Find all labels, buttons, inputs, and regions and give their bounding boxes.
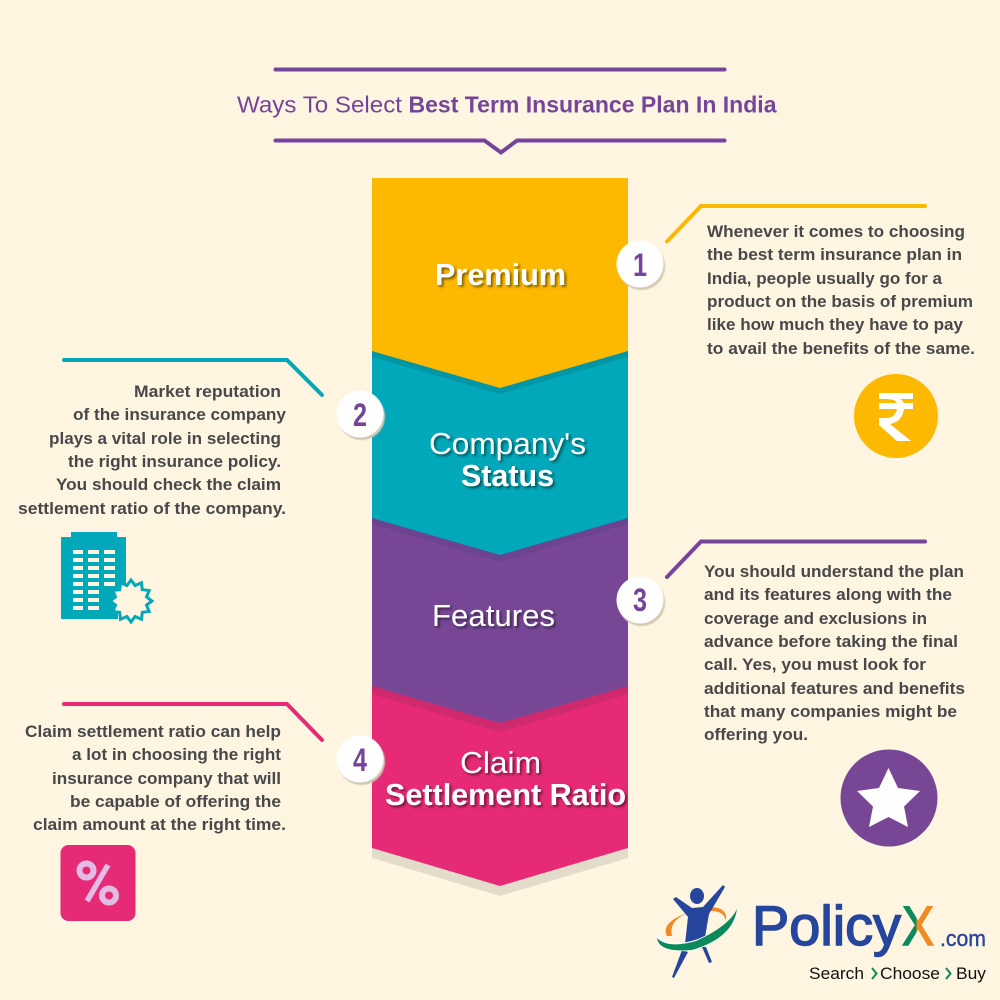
text block 3: that many companies might be xyxy=(704,702,957,721)
logo tagline xyxy=(809,964,987,983)
logo wordmark: .com xyxy=(940,926,986,951)
text block 3: coverage and exclusions in xyxy=(704,609,927,628)
text block 1: product on the basis of premium xyxy=(707,292,973,311)
text block 4: be capable of offering the xyxy=(70,792,281,811)
logo wordmark xyxy=(752,894,986,957)
band heading: Company's Status: Company's xyxy=(429,426,586,461)
text block 3: and its features along with the xyxy=(704,585,952,604)
number badge 3 xyxy=(616,576,664,624)
band heading: Company's Status: Status xyxy=(461,458,554,493)
band: premium xyxy=(372,178,628,388)
text block 1 xyxy=(707,222,975,358)
text block 1: India, people usually go for a xyxy=(707,269,943,288)
band heading: Claim Settlement Ratio: Settlement Ratio xyxy=(385,777,626,812)
icon: rupee xyxy=(854,374,938,458)
number badge 2 xyxy=(336,390,384,438)
text block 3 xyxy=(704,562,965,744)
text block 2: Market reputation xyxy=(134,382,281,401)
band: claim settlement ratio xyxy=(372,685,628,886)
text block 3: offering you. xyxy=(704,725,808,744)
logo wordmark: Policy xyxy=(752,894,901,957)
number badge 2: 2 xyxy=(353,397,367,433)
text block 2 xyxy=(18,382,287,518)
number badge 4 xyxy=(336,736,384,782)
title: Ways To Select xyxy=(237,92,402,118)
icon: building with badge xyxy=(61,532,152,622)
text block 1: like how much they have to pay xyxy=(707,315,964,334)
text block 3: advance before taking the final xyxy=(704,632,958,651)
text block 4 xyxy=(25,722,286,834)
title xyxy=(237,92,777,118)
text block 4: insurance company that will xyxy=(52,769,281,788)
text block 1: the best term insurance plan in xyxy=(707,245,962,264)
band shadow xyxy=(372,840,628,896)
text block 3: additional features and benefits xyxy=(704,679,965,698)
connector 2 xyxy=(64,360,322,395)
text block 1: Whenever it comes to choosing xyxy=(707,222,965,241)
connector 1 xyxy=(667,206,925,242)
text block 2: of the insurance company xyxy=(73,405,287,424)
logo tagline: Choose xyxy=(880,964,940,983)
logo tagline: Search xyxy=(809,964,864,983)
number badge 1: 1 xyxy=(633,247,647,283)
band heading: Claim Settlement Ratio: Claim xyxy=(460,745,541,780)
number badge 3: 3 xyxy=(633,582,647,618)
number badge 4: 4 xyxy=(353,742,367,778)
logo figure xyxy=(657,885,739,978)
band: features xyxy=(372,518,628,723)
logo wordmark: X xyxy=(902,894,934,957)
icon: percent xyxy=(60,845,136,921)
text block 3: call. Yes, you must look for xyxy=(704,655,926,674)
text block 2: You should check the claim xyxy=(56,475,281,494)
text block 2: the right insurance policy. xyxy=(68,452,281,471)
band heading: Claim Settlement Ratio xyxy=(385,745,626,812)
band: company status xyxy=(372,350,628,555)
title block xyxy=(237,70,777,152)
text block 2: plays a vital role in selecting xyxy=(49,429,281,448)
number badge 1 xyxy=(616,240,664,288)
icon: star xyxy=(840,750,938,846)
connector 4 xyxy=(64,704,322,740)
band heading: Features: Features xyxy=(432,598,555,633)
logo tagline: Buy xyxy=(956,964,987,983)
connector 3 xyxy=(667,542,925,577)
text block 3: You should understand the plan xyxy=(704,562,964,581)
central chevron stack xyxy=(372,178,628,896)
band heading: Company's Status xyxy=(429,426,586,493)
logo: PolicyX xyxy=(657,885,987,983)
text block 4: claim amount at the right time. xyxy=(33,815,286,834)
text block 2: settlement ratio of the company. xyxy=(18,499,286,518)
text block 4: Claim settlement ratio can help xyxy=(25,722,281,741)
text block 1: to avail the benefits of the same. xyxy=(707,339,975,358)
text block 4: a lot in choosing the right xyxy=(72,745,281,764)
title: Best Term Insurance Plan In India xyxy=(408,92,777,118)
band heading: Premium: Premium xyxy=(435,257,566,292)
